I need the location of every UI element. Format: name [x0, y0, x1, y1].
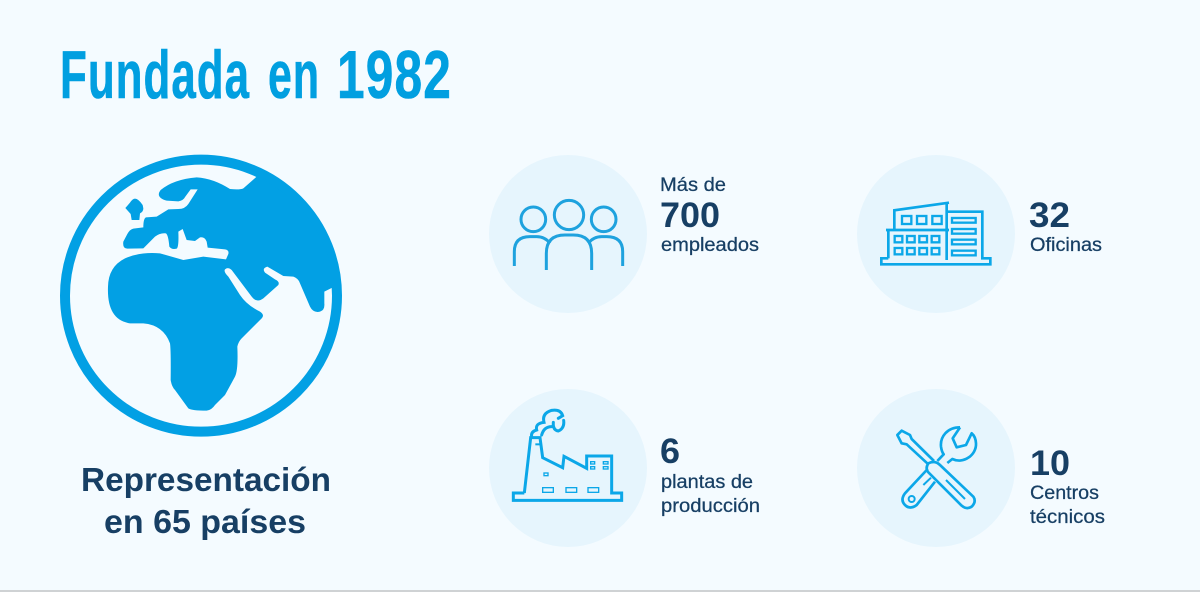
text: technical centres — [1030, 444, 1105, 528]
text: offices: 32 — [1029, 196, 1070, 235]
icon: tools — [897, 427, 976, 508]
panel: technical centres — [857, 389, 1105, 547]
text: offices — [1029, 196, 1102, 256]
icon circle background — [857, 389, 1015, 547]
icon: building — [881, 203, 990, 264]
title: 1982 — [337, 37, 452, 113]
text: employees — [660, 175, 759, 256]
panel: production plants — [489, 389, 760, 547]
icon: factory — [513, 410, 622, 500]
icon circle background — [489, 155, 647, 313]
text: production plants: producción — [661, 496, 760, 517]
panel: employees — [489, 155, 759, 313]
icon: people — [514, 200, 623, 270]
panel: globe representation — [65, 160, 337, 540]
title: en — [268, 37, 320, 113]
text: production plants: plantas de — [661, 472, 753, 493]
icon circle background — [857, 155, 1015, 313]
text: production plants — [660, 432, 760, 517]
label: countries: Representación — [81, 461, 331, 498]
title: Fundada — [60, 37, 250, 113]
panel: offices — [857, 155, 1102, 313]
text: employees: 700 — [660, 196, 720, 235]
text: employees: empleados — [661, 235, 759, 256]
text: technical centres: Centros — [1030, 483, 1099, 504]
icon: globe — [65, 160, 337, 432]
text: offices: Oficinas — [1030, 235, 1102, 256]
text: employees: Más de — [660, 175, 726, 196]
icon circle background — [489, 389, 647, 547]
label: countries — [81, 461, 331, 540]
text: technical centres: técnicos — [1030, 507, 1105, 528]
text: production plants: 6 — [660, 432, 680, 471]
text: technical centres: 10 — [1030, 444, 1070, 483]
label: countries: en 65 países — [104, 503, 306, 540]
